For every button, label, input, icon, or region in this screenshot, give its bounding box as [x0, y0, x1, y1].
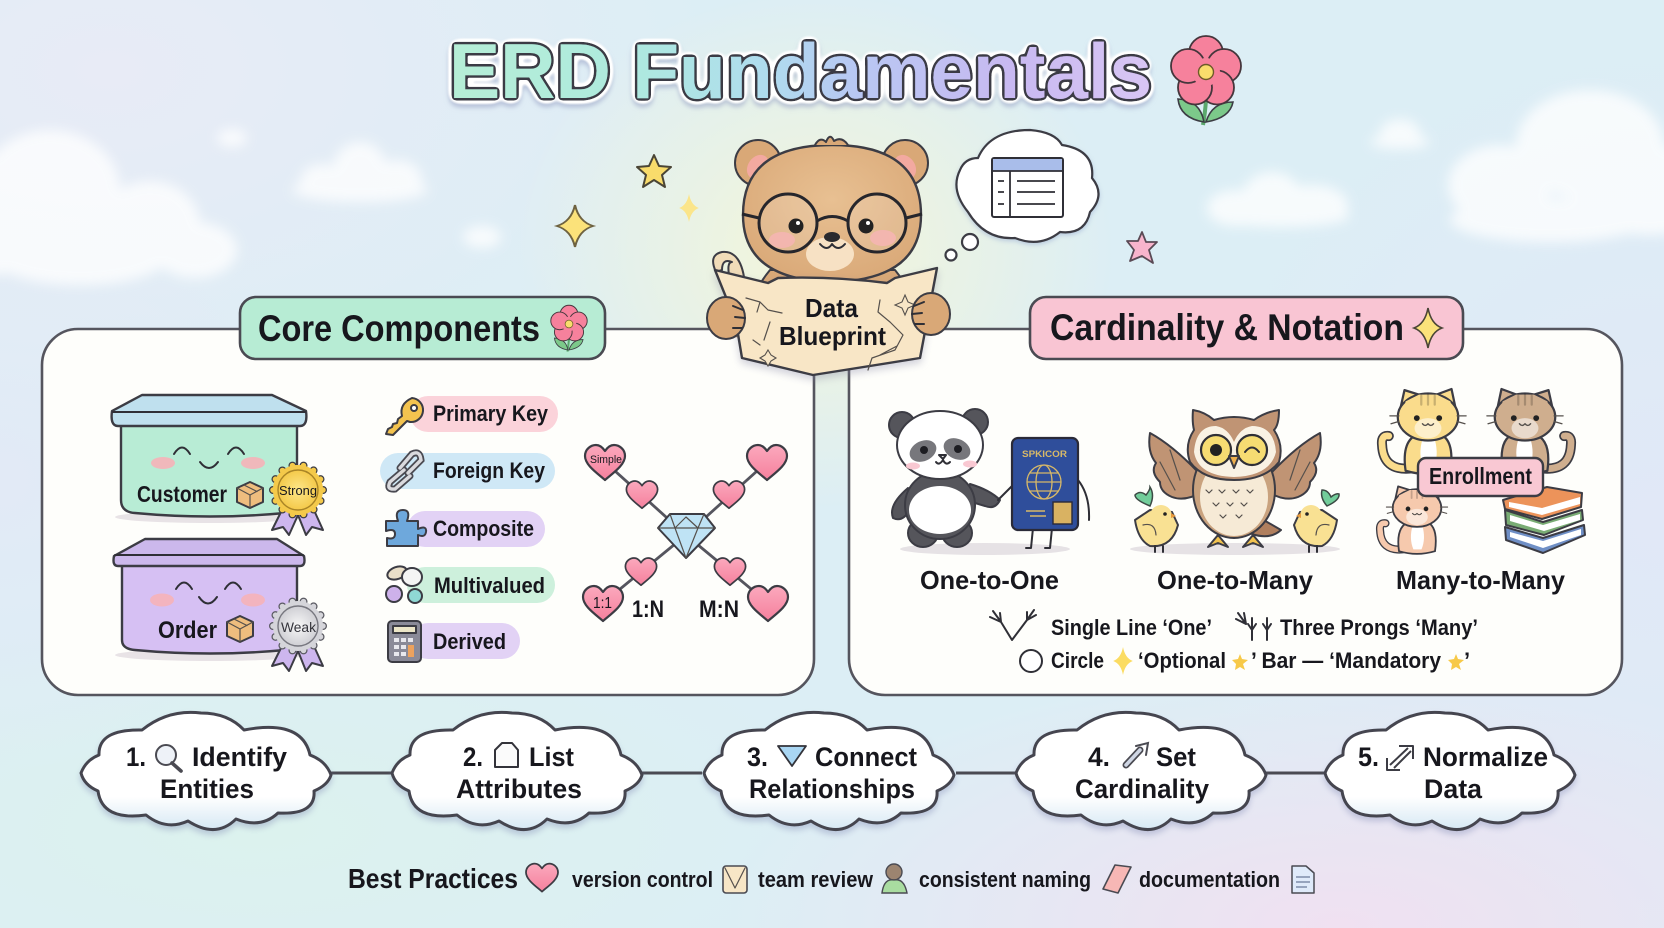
text: consistent naming: consistent naming	[919, 867, 1091, 892]
icon: pink star	[1127, 232, 1157, 263]
step 2	[392, 712, 642, 830]
heading text: Cardinality & Notation	[1050, 307, 1404, 348]
text: Foreign Key	[433, 458, 546, 483]
cheeks	[769, 230, 896, 248]
label: one-to-many: One-to-Many	[1157, 565, 1314, 595]
text: version control: version control	[572, 867, 713, 892]
heading pill: core components	[240, 297, 605, 359]
icon: circle optional	[1020, 650, 1042, 672]
tuft	[815, 137, 848, 145]
icon: ovals	[386, 564, 422, 603]
step 3 text: Connect	[815, 742, 917, 772]
illustration: cats and books	[1380, 389, 1585, 554]
attribute: multivalued	[386, 564, 555, 603]
attribute: primary key	[386, 396, 558, 435]
icon: triangle	[778, 746, 806, 766]
icon: notebook	[1103, 865, 1131, 893]
step 5	[1325, 712, 1575, 830]
text: optional: ‘Optional	[1138, 648, 1226, 673]
icon: single line crow foot	[990, 610, 1036, 640]
heading pill: cardinality	[1030, 297, 1463, 359]
box body	[121, 423, 297, 516]
step 1 number: 1.	[126, 742, 146, 772]
process connectors	[330, 772, 1324, 774]
eyes and nose	[788, 218, 874, 248]
body	[745, 270, 920, 340]
icon: title flower	[1171, 36, 1241, 125]
step 5 text: Normalize	[1423, 742, 1548, 772]
text: bar mandatory: ’ Bar — ‘Mandatory	[1251, 648, 1442, 673]
step 4 text: Set	[1156, 742, 1196, 772]
heading text: Core Components	[258, 308, 540, 349]
step 2 number: 2.	[463, 742, 483, 772]
step 3 number: 3.	[747, 742, 768, 772]
icon: large sparkle	[557, 205, 593, 247]
icon: calculator	[388, 621, 421, 662]
icon: tag	[495, 743, 518, 767]
best practices row	[348, 863, 1314, 894]
face	[150, 582, 265, 606]
entity: customer	[112, 395, 323, 535]
icon: person	[882, 864, 907, 893]
badge text: Weak	[281, 619, 317, 635]
owl	[1149, 410, 1321, 547]
icon: gold star	[637, 155, 671, 187]
label: 1:1: 1:1	[593, 595, 612, 612]
cat yellow	[1382, 389, 1466, 474]
text: Primary Key	[433, 401, 549, 426]
text: three prongs many: Three Prongs ‘Many’	[1280, 615, 1478, 640]
heart	[714, 558, 746, 585]
icon: puzzle piece	[386, 510, 426, 546]
heart: simple	[585, 445, 625, 480]
illustration: owl and chicks	[1130, 410, 1340, 555]
text: single line one: Single Line ‘One’	[1051, 615, 1212, 640]
chick left	[1135, 505, 1178, 552]
badge text: Strong	[279, 483, 317, 498]
attribute: derived	[388, 621, 520, 662]
box lid	[112, 395, 306, 426]
icon: star	[1232, 654, 1248, 670]
head	[743, 145, 921, 282]
attribute: foreign key	[380, 453, 555, 489]
text: circle: Circle	[1051, 648, 1104, 673]
panel: cardinality and notation	[849, 297, 1622, 695]
label: customer: Customer	[137, 481, 227, 507]
label: M:N: M:N	[699, 596, 739, 623]
icon: star	[1448, 654, 1464, 670]
books	[1503, 487, 1585, 553]
diagram: attribute hearts and diamond	[583, 445, 788, 623]
text: Multivalued	[434, 573, 545, 598]
heart	[713, 481, 745, 508]
map: data blueprint	[715, 268, 937, 375]
icon: chain link	[389, 453, 421, 489]
illustration: panda and passport	[889, 409, 1089, 555]
badge: strong	[272, 465, 323, 535]
icon: green hearts	[1135, 487, 1339, 506]
icon: sparkle	[1113, 647, 1133, 675]
map text: blueprint: Blueprint	[779, 321, 886, 351]
step 1 text: Entities	[160, 774, 254, 804]
icon: link arrow	[1126, 743, 1148, 765]
map text: data: Data	[805, 293, 859, 323]
heart	[747, 445, 787, 480]
step 3 text: Relationships	[749, 774, 915, 804]
icon: heading sparkle	[1414, 308, 1442, 348]
step 1	[81, 712, 331, 830]
label: many-to-many: Many-to-Many	[1396, 565, 1566, 595]
step 4	[1016, 712, 1266, 830]
step 4 number: 4.	[1088, 742, 1110, 772]
notation legend	[990, 610, 1478, 675]
enrollment box	[1418, 458, 1543, 496]
icon: cardboard box	[237, 482, 263, 508]
entity: order	[114, 539, 323, 671]
cat brown	[1487, 389, 1571, 474]
background clouds	[0, 90, 1664, 285]
icon: magnifier	[156, 745, 181, 771]
cat peach	[1380, 486, 1448, 554]
step 1 text: Identify	[192, 742, 287, 772]
enrollment text: Enrollment	[1429, 463, 1532, 489]
box body	[122, 564, 297, 654]
step 2 text: List	[529, 742, 574, 772]
scroll curl	[713, 252, 745, 285]
icon: key	[386, 398, 423, 435]
face	[151, 448, 265, 469]
heart	[748, 586, 788, 621]
panda	[889, 409, 1000, 547]
heart: 1:1	[583, 586, 623, 621]
passport	[998, 438, 1089, 548]
label: order: Order	[158, 617, 217, 644]
badge: weak	[272, 601, 323, 671]
heart	[626, 481, 658, 508]
icon: three prongs	[1236, 613, 1271, 640]
illustration: bear mascot	[707, 137, 950, 375]
text: documentation: documentation	[1139, 867, 1280, 892]
text: Derived	[433, 629, 506, 654]
text: closing quote: ’	[1464, 648, 1470, 673]
panel: core components	[42, 297, 814, 695]
attribute: composite	[386, 510, 545, 547]
text: Composite	[433, 516, 534, 541]
muzzle	[806, 237, 854, 271]
text: team review: team review	[758, 867, 874, 892]
icon: card	[723, 866, 747, 893]
icon: table	[992, 158, 1063, 217]
icon: document	[1292, 866, 1314, 893]
heading: best practices: Best Practices	[348, 863, 518, 894]
label: simple: Simple	[590, 454, 622, 466]
title: ERD Fundamentals	[449, 27, 1152, 115]
step 3	[704, 712, 954, 830]
chick right	[1294, 505, 1337, 552]
icon: cardboard box	[227, 616, 253, 642]
icon: small sparkle	[679, 194, 699, 222]
icon: heading flower	[551, 305, 587, 352]
arms	[725, 290, 940, 340]
paws	[707, 293, 950, 339]
passport text: SPKICOR	[1022, 449, 1068, 459]
label: 1:N: 1:N	[632, 596, 664, 623]
step 2 text: Attributes	[456, 774, 582, 804]
step 5 number: 5.	[1358, 742, 1379, 772]
glasses	[742, 194, 922, 252]
icon: diamond	[658, 514, 715, 558]
icon: diagonal arrow	[1387, 746, 1413, 770]
thought bubble with table	[946, 130, 1099, 260]
ears	[735, 140, 928, 186]
label: one-to-one: One-to-One	[920, 565, 1059, 595]
icon: heart	[526, 864, 558, 892]
heart	[625, 558, 657, 585]
box lid	[114, 539, 304, 566]
step 5 text: Data	[1424, 774, 1483, 804]
step 4 text: Cardinality	[1075, 774, 1209, 804]
